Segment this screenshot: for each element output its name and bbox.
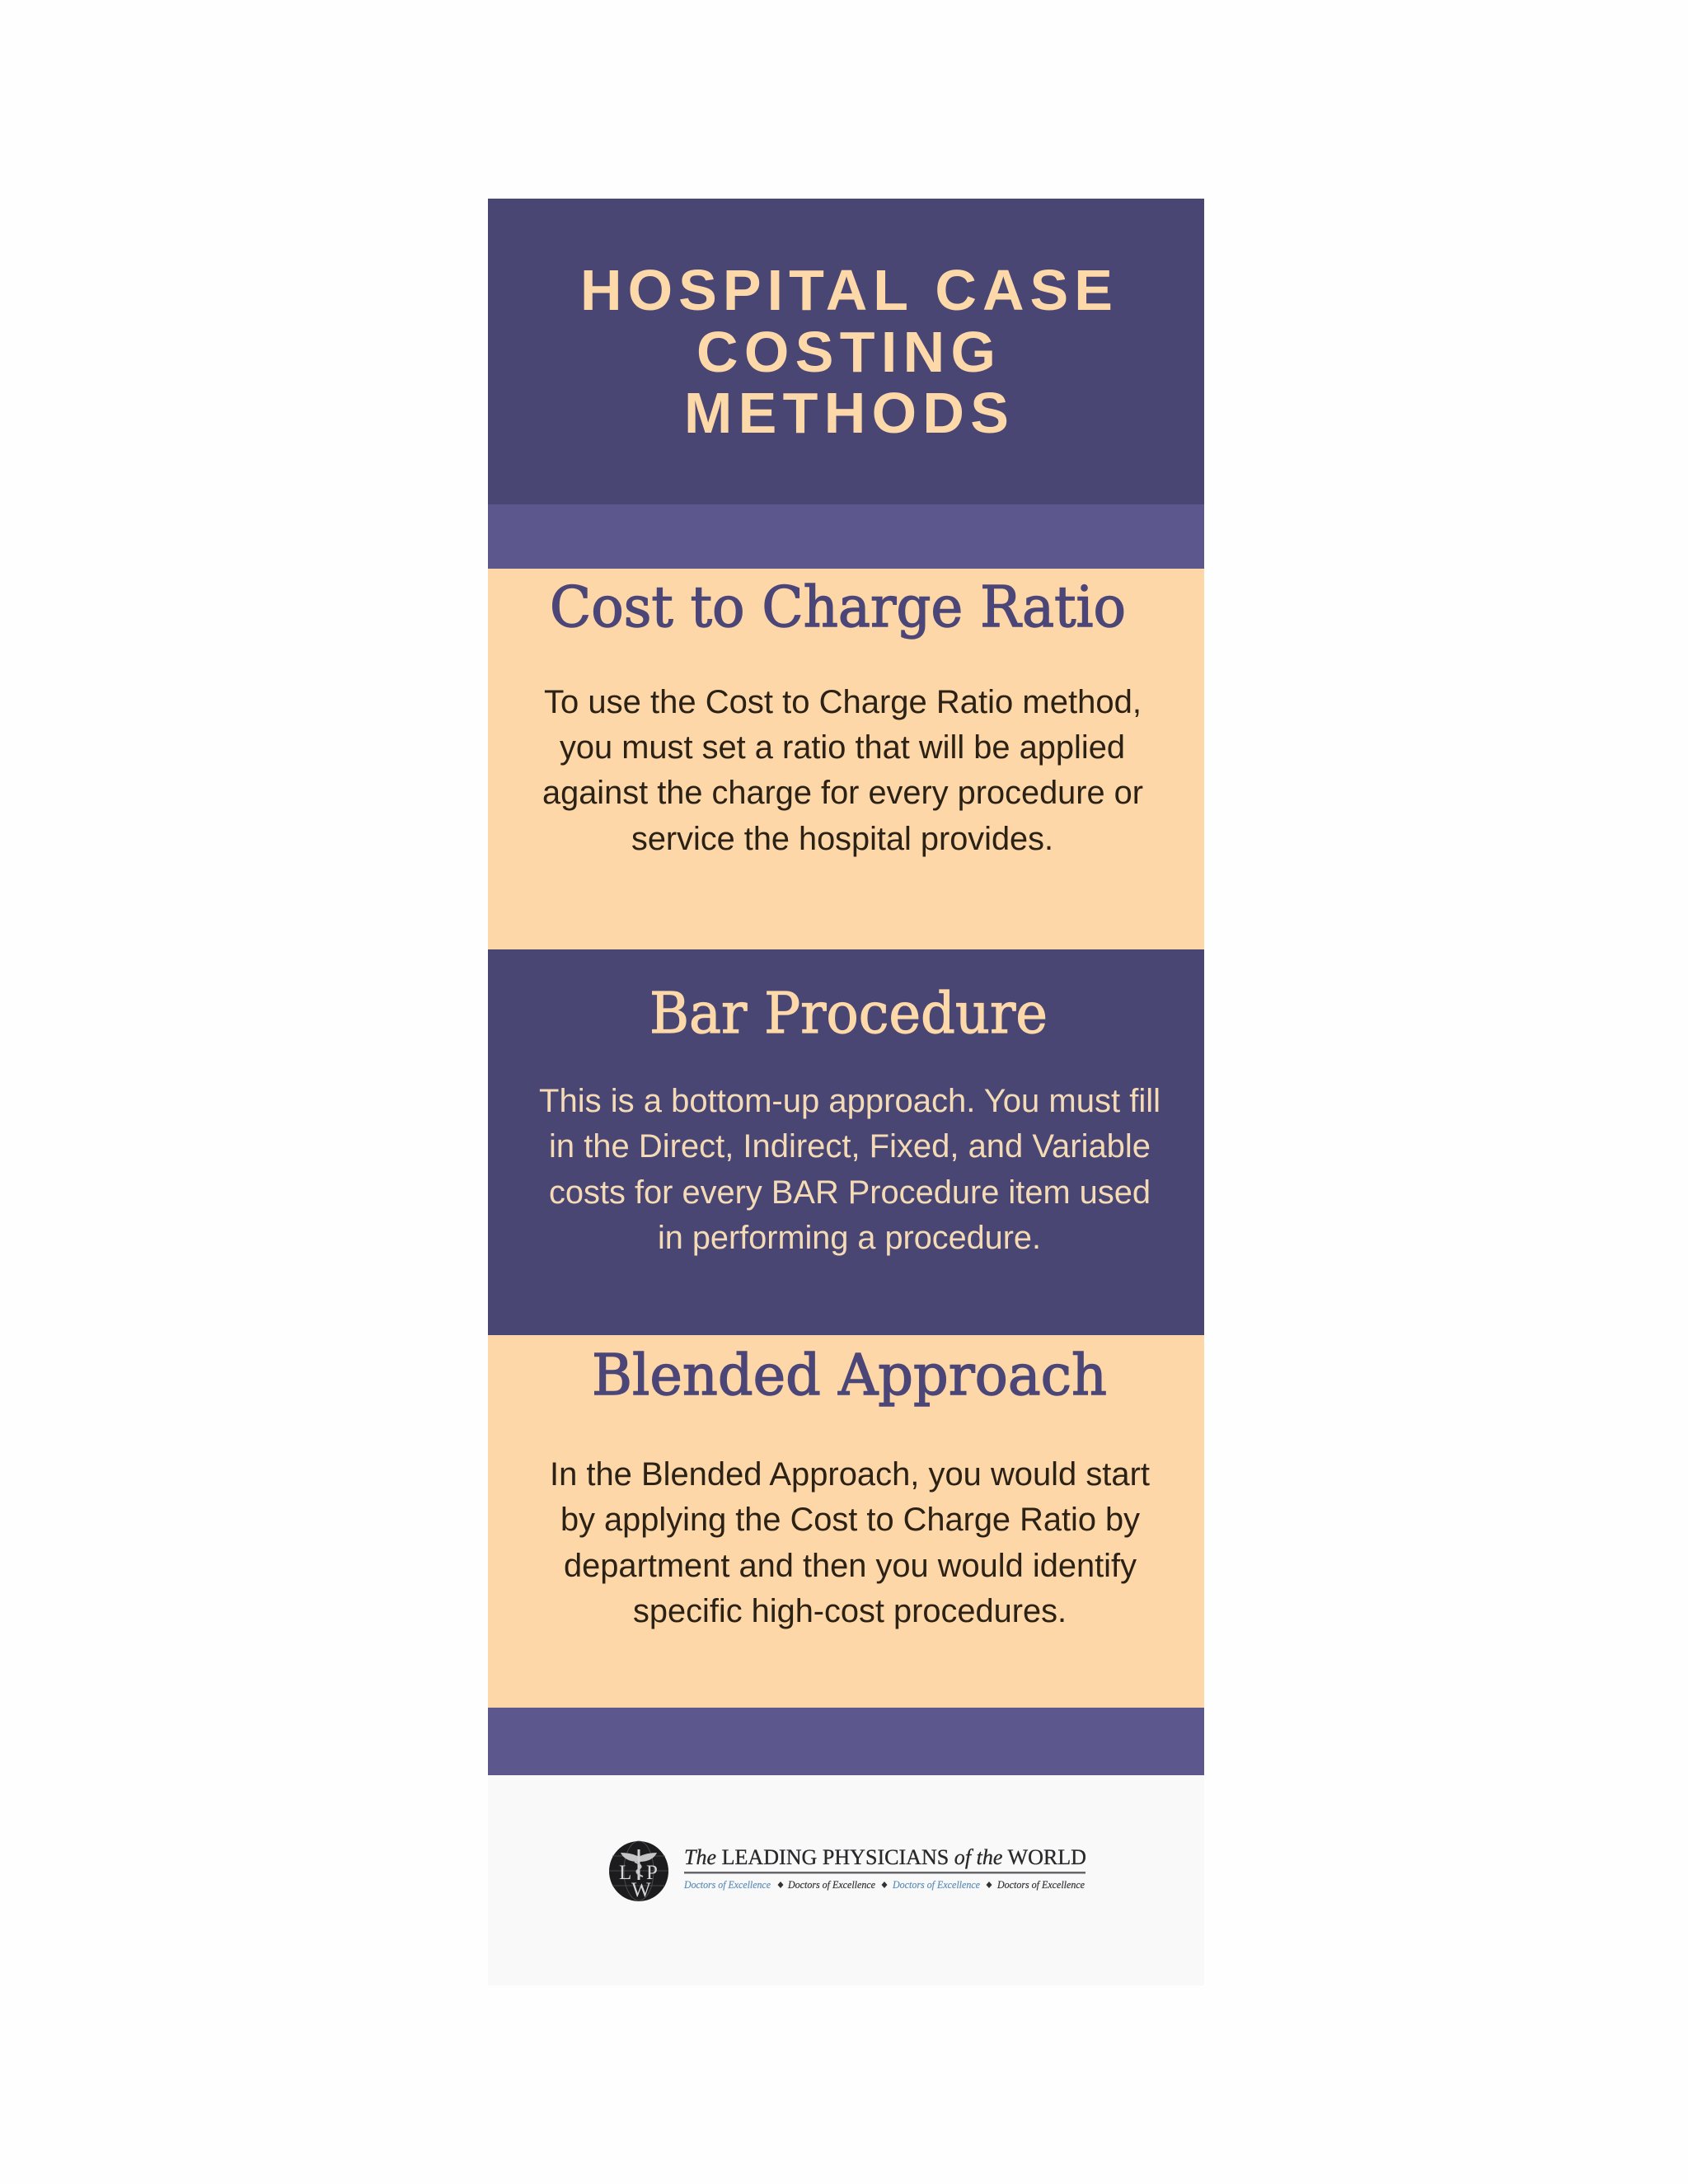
- panel: Blended Approach: [488, 1335, 1204, 1708]
- text block: Blended Approach description: [550, 1456, 1150, 1629]
- logo tagline: Doctors of Excellence: [787, 1878, 875, 1891]
- heading: main title: COSTING: [696, 320, 996, 384]
- heading: main title: [580, 258, 1113, 445]
- text block: Cost to Charge Ratio description: you must set a ratio that will be applied: [560, 729, 1125, 766]
- text block: Bar Procedure description: in the Direct, Indirect, Fixed, and Variable: [549, 1128, 1151, 1165]
- heading: main title: METHODS: [684, 381, 1009, 445]
- heading: Cost to Charge Ratio: Cost to Charge Ratio: [550, 575, 1126, 640]
- text block: Cost to Charge Ratio description: [542, 684, 1143, 857]
- icon: LPW caduceus seal: L: [619, 1862, 631, 1884]
- text block: Blended Approach description: by applying the Cost to Charge Ratio by: [560, 1502, 1140, 1538]
- panel: title header: [488, 199, 1204, 504]
- panel: footer: [488, 1775, 1204, 1985]
- icon: LPW caduceus seal: W: [631, 1879, 651, 1901]
- text block: Bar Procedure description: costs for every BAR Procedure item used: [549, 1174, 1151, 1211]
- heading: Bar Procedure: Bar Procedure: [649, 982, 1048, 1047]
- decorative band: upper: [488, 504, 1204, 569]
- text block: Bar Procedure description: This is a bottom-up approach. You must fill: [539, 1083, 1160, 1119]
- text block: Bar Procedure description: in performing a procedure.: [658, 1220, 1041, 1256]
- text block: Blended Approach description: department and then you would identify: [564, 1548, 1137, 1584]
- logo tagline: [683, 1878, 1085, 1891]
- icon: LPW caduceus seal: [609, 1841, 668, 1901]
- logo wordmark: The LEADING PHYSICIANS of the WORLD: [684, 1845, 1086, 1869]
- text block: Blended Approach description: specific high-cost procedures.: [633, 1593, 1067, 1629]
- logo tagline: Doctors of Excellence: [892, 1878, 980, 1891]
- text block: Cost to Charge Ratio description: To use the Cost to Charge Ratio method,: [544, 684, 1142, 720]
- logo tagline: Doctors of Excellence: [996, 1878, 1085, 1891]
- panel: Cost to Charge Ratio: [488, 569, 1204, 949]
- icon: LPW caduceus seal: P: [646, 1862, 658, 1884]
- panel: Bar Procedure: [488, 949, 1204, 1335]
- text block: Blended Approach description: In the Blended Approach, you would start: [550, 1456, 1150, 1493]
- decorative band: lower: [488, 1708, 1204, 1775]
- text block: Cost to Charge Ratio description: service the hospital provides.: [631, 821, 1053, 857]
- logo rule: [684, 1872, 1085, 1874]
- heading: Blended Approach: Blended Approach: [592, 1343, 1107, 1408]
- logo tagline: Doctors of Excellence: [683, 1878, 771, 1891]
- text block: Cost to Charge Ratio description: against the charge for every procedure or: [542, 775, 1143, 811]
- heading: main title: HOSPITAL CASE: [580, 258, 1113, 322]
- text block: Bar Procedure description: [539, 1083, 1160, 1256]
